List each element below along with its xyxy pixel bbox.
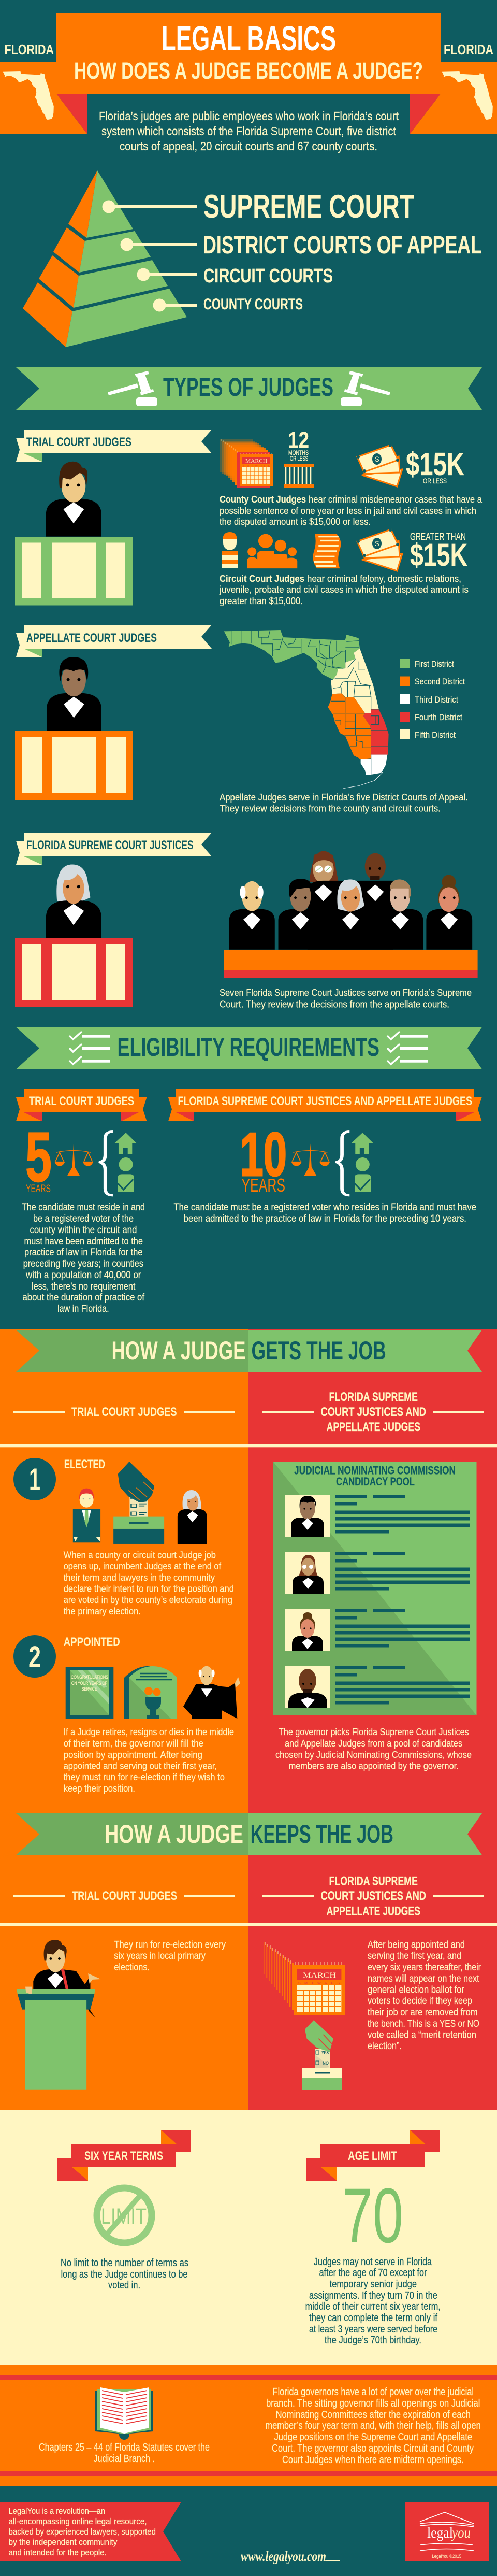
six year terms text: voted in. bbox=[108, 2280, 140, 2291]
stat: 12 months or less: MONTHS bbox=[288, 449, 309, 456]
banner: how a judge gets the job: GETS THE JOB bbox=[252, 1336, 386, 1365]
banner: how a judge gets the job: HOW A JUDGE bbox=[112, 1336, 245, 1365]
map legend: First District bbox=[415, 659, 454, 669]
stat: 5 years: YEARS bbox=[26, 1183, 51, 1195]
illustration: yes or no ballot bbox=[302, 2020, 342, 2090]
stat: greater than $15K: GREATER THAN bbox=[410, 532, 466, 543]
column heading: keeps supreme justices and appellate bbox=[262, 1874, 484, 1919]
icon: trial judge at bench bbox=[15, 462, 133, 605]
elected text: declare their intent to run for the position and bbox=[64, 1583, 234, 1594]
eligibility text: trial: preceding five years; in counties bbox=[23, 1258, 143, 1269]
statutes text: Judicial Branch . bbox=[94, 2453, 155, 2465]
title: LEGAL BASICS bbox=[162, 19, 336, 58]
heading: types of judges: TYPES OF JUDGES bbox=[163, 373, 333, 402]
eligibility text: trial: less, there’s no requirement bbox=[32, 1281, 136, 1292]
heading: appointed: APPOINTED bbox=[64, 1635, 120, 1649]
age limit text: at least 3 years were served before bbox=[309, 2324, 437, 2335]
ribbon: age limit bbox=[306, 2130, 440, 2181]
ribbon: eligibility trial court judges bbox=[16, 1089, 147, 1121]
keeps text: supreme: After being appointed and bbox=[368, 1940, 465, 1950]
banner: how a judge gets the job bbox=[16, 1330, 482, 1372]
appointed text: keep their position. bbox=[64, 1783, 135, 1794]
icon: gavel right bbox=[341, 371, 390, 406]
stat: 10 years bbox=[240, 1120, 287, 1196]
appointed text: position by appointment. After being bbox=[64, 1749, 202, 1760]
candidate card two bbox=[285, 1552, 470, 1594]
icon: money stack one: $ bbox=[375, 455, 379, 463]
eligibility text: trial: with a population of 40,000 or bbox=[25, 1270, 141, 1281]
keeps text: supreme: their job or are removed from bbox=[368, 2007, 478, 2018]
ribbon: Florida Supreme Court justices bbox=[16, 833, 212, 865]
keeps text: supreme bbox=[368, 1940, 481, 2052]
six year terms text: long as the Judge continues to be bbox=[61, 2269, 187, 2280]
governor picks text: members are also appointed by the governor. bbox=[289, 1761, 459, 1771]
illustration: yes or no ballot: YES bbox=[321, 2050, 329, 2056]
illustration: judge at lectern bbox=[17, 1940, 101, 2090]
stat: greater than $15K: $15K bbox=[410, 537, 467, 573]
stat: age 70: 70 bbox=[342, 2172, 403, 2259]
heading: eligibility requirements: ELIGIBILITY REQUIREMENTS bbox=[117, 1033, 379, 1062]
appointed text: of their term, the governor will fill the bbox=[64, 1738, 203, 1749]
banner: types of judges bbox=[16, 367, 482, 410]
keeps text: trial: They run for re-election every bbox=[114, 1940, 226, 1950]
map legend bbox=[400, 659, 465, 740]
elected text: When a county or circuit court Judge job bbox=[64, 1549, 216, 1561]
icon: family bbox=[247, 534, 297, 568]
icon: checklist right bbox=[387, 1032, 428, 1064]
stat: 5 years: 5 bbox=[25, 1118, 52, 1196]
appointed text: they must run for re-election if they wish to bbox=[64, 1771, 225, 1782]
supreme court text bbox=[220, 987, 472, 1010]
keeps text: supreme: election”. bbox=[368, 2041, 402, 2052]
icon: seven justices behind bench bbox=[224, 851, 478, 978]
banner: how a judge keeps the job bbox=[16, 1813, 482, 1855]
logo: LegalYou: legal bbox=[427, 2524, 453, 2541]
step 2: appointed badge: 2 bbox=[28, 1640, 41, 1674]
keeps text: trial bbox=[114, 1940, 226, 1973]
left label: Florida: FLORIDA bbox=[4, 41, 54, 58]
statutes text bbox=[39, 2442, 210, 2465]
age limit text: Judges may not serve in Florida bbox=[314, 2256, 432, 2268]
ribbon: Florida Supreme Court justices: FLORIDA SUPREME COURT JUSTICES bbox=[26, 838, 194, 852]
ribbon: appellate court judges: APPELLATE COURT JUDGES bbox=[26, 631, 157, 645]
elected text: opens up, incumbent Judges at the end of bbox=[64, 1561, 222, 1571]
panel: limits on cream background bbox=[0, 2110, 497, 2365]
ribbon: appellate court judges bbox=[16, 625, 212, 657]
eligibility text: trial: must have been admitted to the bbox=[24, 1236, 143, 1247]
panel title: CANDIDACY POOL bbox=[336, 1475, 415, 1488]
age limit text: assignments. If they turn 70 in the bbox=[309, 2290, 437, 2301]
icon: framed certificate: CONGRATULATIONS bbox=[71, 1675, 108, 1680]
supreme court text: Seven Florida Supreme Court Justices serve on Florida’s Supreme bbox=[220, 987, 472, 998]
supreme court text: Court. They review the decisions from the appellate courts. bbox=[220, 999, 449, 1010]
icon: framed certificate bbox=[66, 1667, 113, 1719]
county court text: County Court Judges bbox=[220, 494, 306, 505]
column heading: supreme justices and appellate bbox=[262, 1390, 484, 1434]
footer flag: about LegalYou: by the independent community bbox=[8, 2537, 118, 2547]
icon: Florida silhouette left bbox=[3, 71, 54, 120]
governor picks text bbox=[275, 1726, 472, 1771]
stat: 10 years: 10 bbox=[240, 1120, 287, 1189]
stat: 10 years: YEARS bbox=[241, 1175, 285, 1196]
panel: judicial nominating commission candidacy pool bbox=[273, 1462, 476, 1715]
age limit text: they can complete the term only if bbox=[309, 2312, 437, 2324]
candidate card one bbox=[285, 1495, 470, 1537]
ribbon: six year terms: SIX YEAR TERMS bbox=[84, 2149, 163, 2163]
eligibility text: trial: county within the circuit and bbox=[30, 1225, 137, 1236]
appointed text: appointed and serving out their first year, bbox=[64, 1761, 217, 1771]
appointed text: If a Judge retires, resigns or dies in the middle bbox=[64, 1726, 234, 1737]
column heading: keeps supreme justices and appellate: COURT JUSTICES AND bbox=[321, 1889, 426, 1903]
icon: prisoner bbox=[222, 532, 238, 568]
eligibility text: trial: be a registered voter of the bbox=[33, 1213, 134, 1224]
illustration: voting for a judge bbox=[73, 1462, 207, 1544]
candidate card three bbox=[285, 1609, 470, 1651]
appointed text bbox=[64, 1726, 234, 1794]
governor picks text: and Appellate Judges from a pool of candidates bbox=[285, 1738, 462, 1749]
ribbon: six year terms bbox=[57, 2130, 191, 2181]
candidate card four bbox=[285, 1666, 470, 1708]
appellate text: Appellate Judges serve in Florida’s five District Courts of Appeal. bbox=[220, 792, 468, 803]
ribbon: trial court judges: TRIAL COURT JUDGES bbox=[26, 435, 131, 449]
icon: calendar years stack: MARCH bbox=[303, 1971, 336, 1980]
map legend: Fifth District bbox=[415, 730, 456, 740]
elected text: their term and lawyers in the community bbox=[64, 1572, 215, 1583]
age limit text bbox=[305, 2256, 441, 2346]
stat: $15K or less: OR LESS bbox=[423, 477, 447, 485]
eligibility text: supreme and appellate: been admitted to the practice of law in Florida for the preceding 10 years. bbox=[183, 1213, 466, 1224]
circuit court text: greater than $15,000. bbox=[220, 595, 303, 606]
pyramid of courts bbox=[23, 170, 197, 347]
intro text: system which consists of the Florida Supreme Court, five district bbox=[101, 124, 397, 138]
footer flag: about LegalYou: backed by experienced lawyers, supported bbox=[8, 2527, 156, 2537]
elected text: the primary election. bbox=[64, 1606, 141, 1616]
icon: supreme court justice at bench bbox=[15, 865, 133, 1007]
age limit text: temporary senior judge bbox=[330, 2279, 417, 2290]
column heading: supreme justices and appellate: COURT JUSTICES AND bbox=[321, 1405, 426, 1419]
stat: 12 months or less bbox=[288, 427, 309, 462]
header banner bbox=[0, 13, 497, 134]
eligibility text: trial bbox=[22, 1202, 145, 1314]
icon: legal scroll bbox=[313, 534, 341, 568]
icon: no limit sign bbox=[97, 2188, 152, 2243]
icon: gavel left bbox=[108, 371, 157, 406]
keeps text: supreme: names will appear on the next bbox=[368, 1973, 479, 1984]
logo: LegalYou: LegalYou ©2015 bbox=[432, 2554, 461, 2559]
panel title bbox=[294, 1464, 456, 1488]
keeps text: supreme: general election ballot for bbox=[368, 1984, 465, 1996]
governor picks text: The governor picks Florida Supreme Court Justices bbox=[279, 1726, 469, 1737]
county court text: possible sentence of one year or less in jail and civil cases in which bbox=[220, 505, 476, 516]
footer flag: about LegalYou bbox=[0, 2502, 181, 2561]
eligibility text: supreme and appellate bbox=[174, 1202, 476, 1224]
circuit court text bbox=[219, 573, 469, 606]
keeps text: trial: elections. bbox=[114, 1962, 150, 1973]
elected text: are voted in by the county’s electorate during bbox=[64, 1594, 232, 1605]
column heading: keeps trial court judges: TRIAL COURT JUDGES bbox=[72, 1889, 177, 1903]
icon: calendar stack bbox=[220, 439, 273, 488]
county court text bbox=[220, 494, 483, 527]
website address: www.legalyou.com bbox=[241, 2549, 326, 2564]
banner: how a judge keeps the job: HOW A JUDGE bbox=[105, 1820, 243, 1849]
column heading: keeps supreme justices and appellate: FLORIDA SUPREME bbox=[329, 1874, 418, 1888]
logo: LegalYou bbox=[405, 2502, 489, 2561]
statutes text: Chapters 25 – 44 of Florida Statutes cover the bbox=[39, 2442, 210, 2453]
icon: jail bars bbox=[284, 464, 314, 488]
pyramid labels: CIRCUIT COURTS bbox=[203, 265, 333, 287]
circuit court text: Circuit Court Judges bbox=[220, 573, 304, 584]
circuit court text: hear criminal felony, domestic relations, bbox=[307, 573, 461, 584]
logo: LegalYou: you bbox=[451, 2524, 471, 2541]
age limit text: after the age of 70 except for bbox=[319, 2267, 427, 2279]
intro text bbox=[99, 109, 399, 153]
keeps text: supreme: voters to decide if they keep bbox=[368, 1996, 472, 2007]
ribbon: eligibility trial court judges: TRIAL COURT JUDGES bbox=[29, 1094, 134, 1108]
intro text: Florida’s judges are public employees who work in Florida’s court bbox=[99, 109, 399, 123]
elected text bbox=[64, 1549, 234, 1616]
age limit text: middle of their current six year term, bbox=[305, 2301, 441, 2312]
governor power text bbox=[265, 2386, 481, 2466]
map legend: Second District bbox=[415, 677, 465, 686]
step 1: elected badge: 1 bbox=[29, 1462, 40, 1497]
icon: scales and requirements left bbox=[54, 1132, 136, 1195]
panel: statutes band bbox=[0, 2365, 497, 2486]
ribbon: age limit: AGE LIMIT bbox=[348, 2149, 397, 2163]
icon: money stack one bbox=[357, 444, 402, 486]
icon: money stack two: $ bbox=[375, 539, 379, 548]
stat: greater than $15K bbox=[410, 532, 467, 573]
map legend: Fourth District bbox=[415, 712, 462, 722]
six year terms text bbox=[61, 2257, 188, 2291]
icon: framed certificate: SERVICE bbox=[82, 1686, 97, 1692]
illustration: yes or no ballot: NO bbox=[323, 2060, 329, 2066]
pyramid labels: SUPREME COURT bbox=[203, 189, 414, 225]
governor picks text: chosen by Judicial Nominating Commissions, whose bbox=[275, 1749, 472, 1760]
icon: no limit sign: LIMIT bbox=[101, 2204, 147, 2229]
age limit text: the Judge’s 70th birthday. bbox=[325, 2335, 421, 2346]
column heading: keeps supreme justices and appellate: APPELLATE JUDGES bbox=[327, 1905, 420, 1919]
keeps text: supreme: vote called a “merit retention bbox=[368, 2030, 476, 2040]
icon: checklist left bbox=[69, 1032, 110, 1064]
banner: eligibility requirements bbox=[16, 1027, 482, 1069]
icon: Florida silhouette right bbox=[442, 71, 493, 120]
intro text: courts of appeal, 20 circuit courts and 67 county courts. bbox=[120, 139, 377, 153]
icon: open book bbox=[95, 2387, 153, 2440]
step 2: appointed badge bbox=[13, 1635, 56, 1678]
icon: scales and requirements right bbox=[291, 1132, 373, 1195]
column heading: supreme justices and appellate: APPELLATE JUDGES bbox=[327, 1420, 420, 1434]
map legend: Third District bbox=[415, 695, 458, 705]
footer flag: about LegalYou: and intended for the people. bbox=[8, 2548, 107, 2557]
column heading: trial court judges: TRIAL COURT JUDGES bbox=[71, 1405, 177, 1419]
stat: 5 years bbox=[25, 1118, 52, 1196]
column heading: supreme justices and appellate: FLORIDA SUPREME bbox=[329, 1390, 418, 1404]
icon: calendar stack: MARCH bbox=[245, 458, 267, 464]
step 1: elected badge bbox=[13, 1458, 56, 1500]
appellate text: They review decisions from the county and circuit courts. bbox=[220, 803, 441, 813]
icon: memorial plaque with flowers bbox=[124, 1666, 177, 1719]
icon: appellate judge at bench bbox=[15, 657, 133, 800]
stat: 12 months or less: 12 bbox=[288, 427, 309, 453]
keeps text: supreme: serving the first year, and bbox=[368, 1951, 461, 1962]
eligibility text: trial: The candidate must reside in and bbox=[22, 1202, 145, 1213]
stat: $15K or less: $15K bbox=[406, 447, 464, 482]
icon: money stack two bbox=[357, 528, 402, 571]
eligibility text: trial: practice of law in Florida for the bbox=[24, 1247, 143, 1258]
map: Florida appellate districts bbox=[224, 630, 389, 789]
six year terms text: No limit to the number of terms as bbox=[61, 2257, 188, 2269]
icon: calendar years stack bbox=[264, 1942, 345, 2015]
panel title: JUDICIAL NOMINATING COMMISSION bbox=[294, 1464, 456, 1477]
icon: framed certificate: ON YOUR YEARS OF bbox=[71, 1681, 107, 1686]
pyramid labels bbox=[203, 189, 482, 313]
icon: calendar stack: SMTWRFS bbox=[243, 465, 270, 468]
pyramid labels: COUNTY COURTS bbox=[203, 296, 303, 313]
circuit court text: juvenile, probate and civil cases in which the disputed amount is bbox=[219, 584, 469, 595]
footer flag: about LegalYou: LegalYou is a revolution—an bbox=[8, 2506, 105, 2516]
eligibility text: trial: about the duration of practice of bbox=[23, 1292, 145, 1303]
keeps text: trial: six years in local primary bbox=[114, 1951, 206, 1962]
eligibility text: trial: law in Florida. bbox=[57, 1304, 109, 1314]
county court text: hear criminal misdemeanor cases that have a bbox=[309, 494, 483, 505]
heading: elected: ELECTED bbox=[64, 1457, 105, 1471]
ribbon: eligibility supreme and appellate bbox=[168, 1089, 482, 1121]
icon: calendar years stack: SMTWRFS bbox=[298, 1982, 340, 1985]
footer flag: about LegalYou: all-encompassing online legal resource, bbox=[8, 2516, 147, 2526]
county court text: the disputed amount is $15,000 or less. bbox=[220, 516, 371, 527]
appellate text bbox=[220, 792, 468, 813]
banner: how a judge keeps the job: KEEPS THE JOB bbox=[251, 1820, 393, 1849]
icon: retiring judge bbox=[183, 1666, 240, 1719]
stat: 12 months or less: OR LESS bbox=[290, 455, 308, 462]
section backgrounds: orange and red panels bbox=[0, 1329, 497, 2110]
ribbon: trial court judges bbox=[16, 430, 212, 462]
